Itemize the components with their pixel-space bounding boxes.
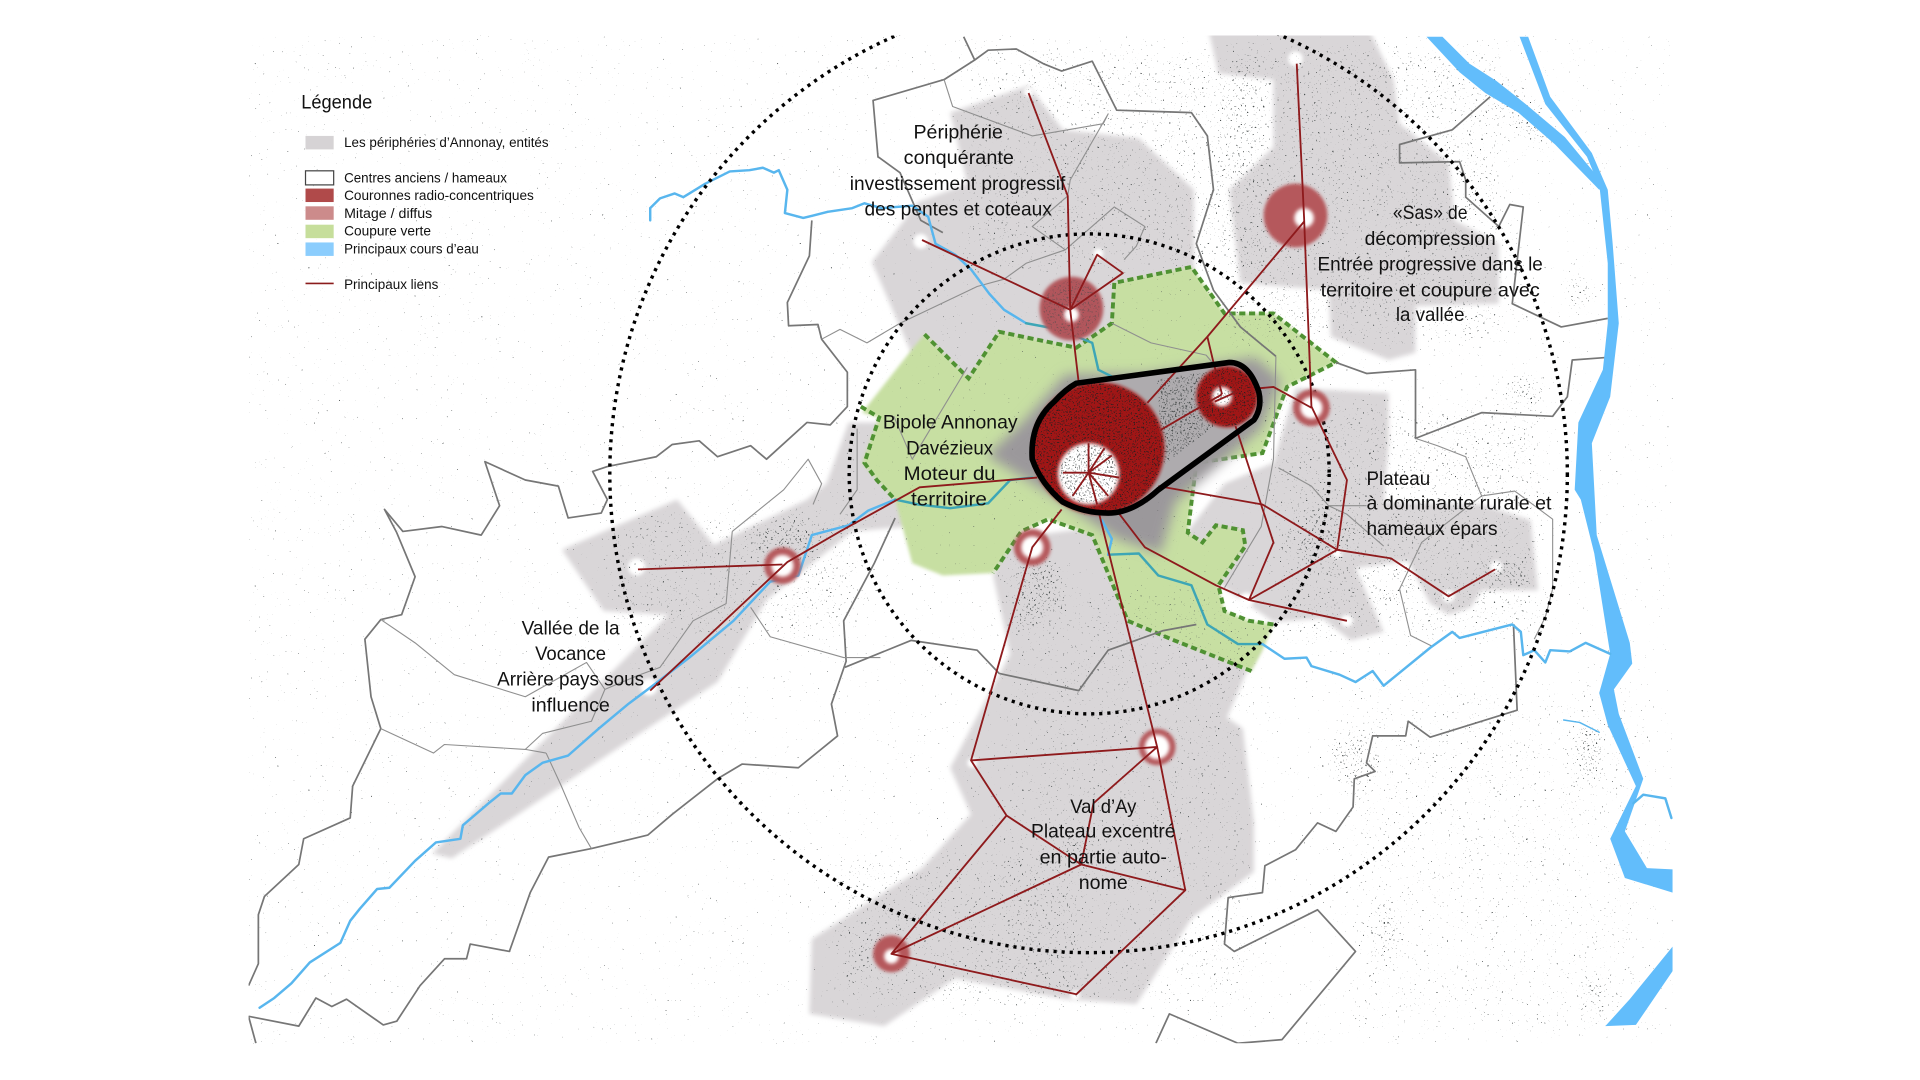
white clearings around hamlets xyxy=(628,51,1502,1000)
label: Périphérie conquérante: investissement progressif xyxy=(850,174,1066,195)
label: Plateau rural: hameaux épars xyxy=(1367,519,1498,540)
legend item: coupure verte: Coupure verte xyxy=(344,224,431,239)
light red hubs xyxy=(764,184,1330,972)
main links xyxy=(638,64,1495,994)
label: Val d'Ay: Val d’Ay xyxy=(1070,797,1137,818)
label: Sas de décompression: «Sas» de xyxy=(1393,203,1468,224)
urban dark halo xyxy=(987,358,1281,553)
legend item: liens: Principaux liens xyxy=(344,277,439,292)
label: Sas de décompression: décompression xyxy=(1365,229,1496,250)
grey entities: peripheries of Annonay xyxy=(432,24,1538,1026)
black belt around bipole xyxy=(1032,362,1260,513)
label: Périphérie conquérante xyxy=(850,122,1066,221)
label: Vallée de la Vocance: Vallée de la xyxy=(522,618,620,639)
label: Val d'Ay: Plateau excentré xyxy=(1031,822,1176,843)
legend item: cours d'eau: Principaux cours d’eau xyxy=(344,241,479,256)
entity: Vallée de la Vocance xyxy=(432,422,906,858)
settlement speckles xyxy=(612,49,1641,1029)
green belt: coupure verte xyxy=(861,267,1336,671)
label: Vallée de la Vocance xyxy=(497,618,644,716)
label: Vallée de la Vocance: influence xyxy=(531,695,610,716)
label: Sas de décompression: territoire et coupure avec xyxy=(1321,280,1540,301)
bipole belt interior xyxy=(1106,366,1256,504)
label: Sas de décompression xyxy=(1318,203,1543,326)
label: Vallée de la Vocance: Arrière pays sous xyxy=(497,670,644,691)
legend xyxy=(301,91,549,292)
Rhône river xyxy=(1427,37,1673,1026)
legend item: centres anciens: Centres anciens / hameaux xyxy=(344,170,507,185)
legend item: entités: Les périphéries d’Annonay, entités xyxy=(344,135,549,150)
entity: Plateau rural xyxy=(1182,388,1538,640)
entity: Sas de décompression xyxy=(1207,24,1499,360)
legend item: couronnes: Couronnes radio-concentriques xyxy=(344,188,534,203)
label: Sas de décompression: la vallée xyxy=(1396,305,1464,326)
bipole red hubs xyxy=(1032,366,1258,514)
legend item: mitage xyxy=(306,206,433,221)
entity: Val d'Ay xyxy=(809,527,1261,1026)
label: Plateau rural xyxy=(1367,469,1552,540)
label: Bipole Annonay: territoire xyxy=(911,490,987,511)
label: Bipole Annonay: Bipole Annonay xyxy=(883,413,1018,434)
map xyxy=(249,0,1673,1043)
label: Bipole Annonay: Moteur du xyxy=(904,464,996,485)
entity: Périphérie conquérante xyxy=(872,86,1194,392)
label: Bipole Annonay: Davézieux xyxy=(906,438,994,459)
label: Plateau rural: à dominante rurale et xyxy=(1367,493,1552,514)
label: Périphérie conquérante: des pentes et coteaux xyxy=(864,200,1052,221)
dotted radius circles xyxy=(610,0,1567,953)
legend item: mitage: Mitage / diffus xyxy=(344,206,433,221)
label: Val d'Ay: en partie auto- xyxy=(1040,847,1167,868)
label: Périphérie conquérante: conquérante xyxy=(904,148,1014,169)
label: Plateau rural: Plateau xyxy=(1367,469,1430,490)
legend item: coupure verte xyxy=(306,224,431,239)
rivers xyxy=(260,168,1671,1008)
commune borders xyxy=(249,37,1608,1043)
label: Bipole Annonay xyxy=(883,413,1018,511)
label: Val d'Ay: nome xyxy=(1079,873,1128,894)
label: Sas de décompression: Entrée progressive dans le xyxy=(1318,255,1543,276)
label: Val d'Ay xyxy=(1031,797,1176,894)
label: Périphérie conquérante: Périphérie xyxy=(913,122,1003,143)
label: Vallée de la Vocance: Vocance xyxy=(535,644,606,665)
legend title: Légende xyxy=(301,91,372,113)
